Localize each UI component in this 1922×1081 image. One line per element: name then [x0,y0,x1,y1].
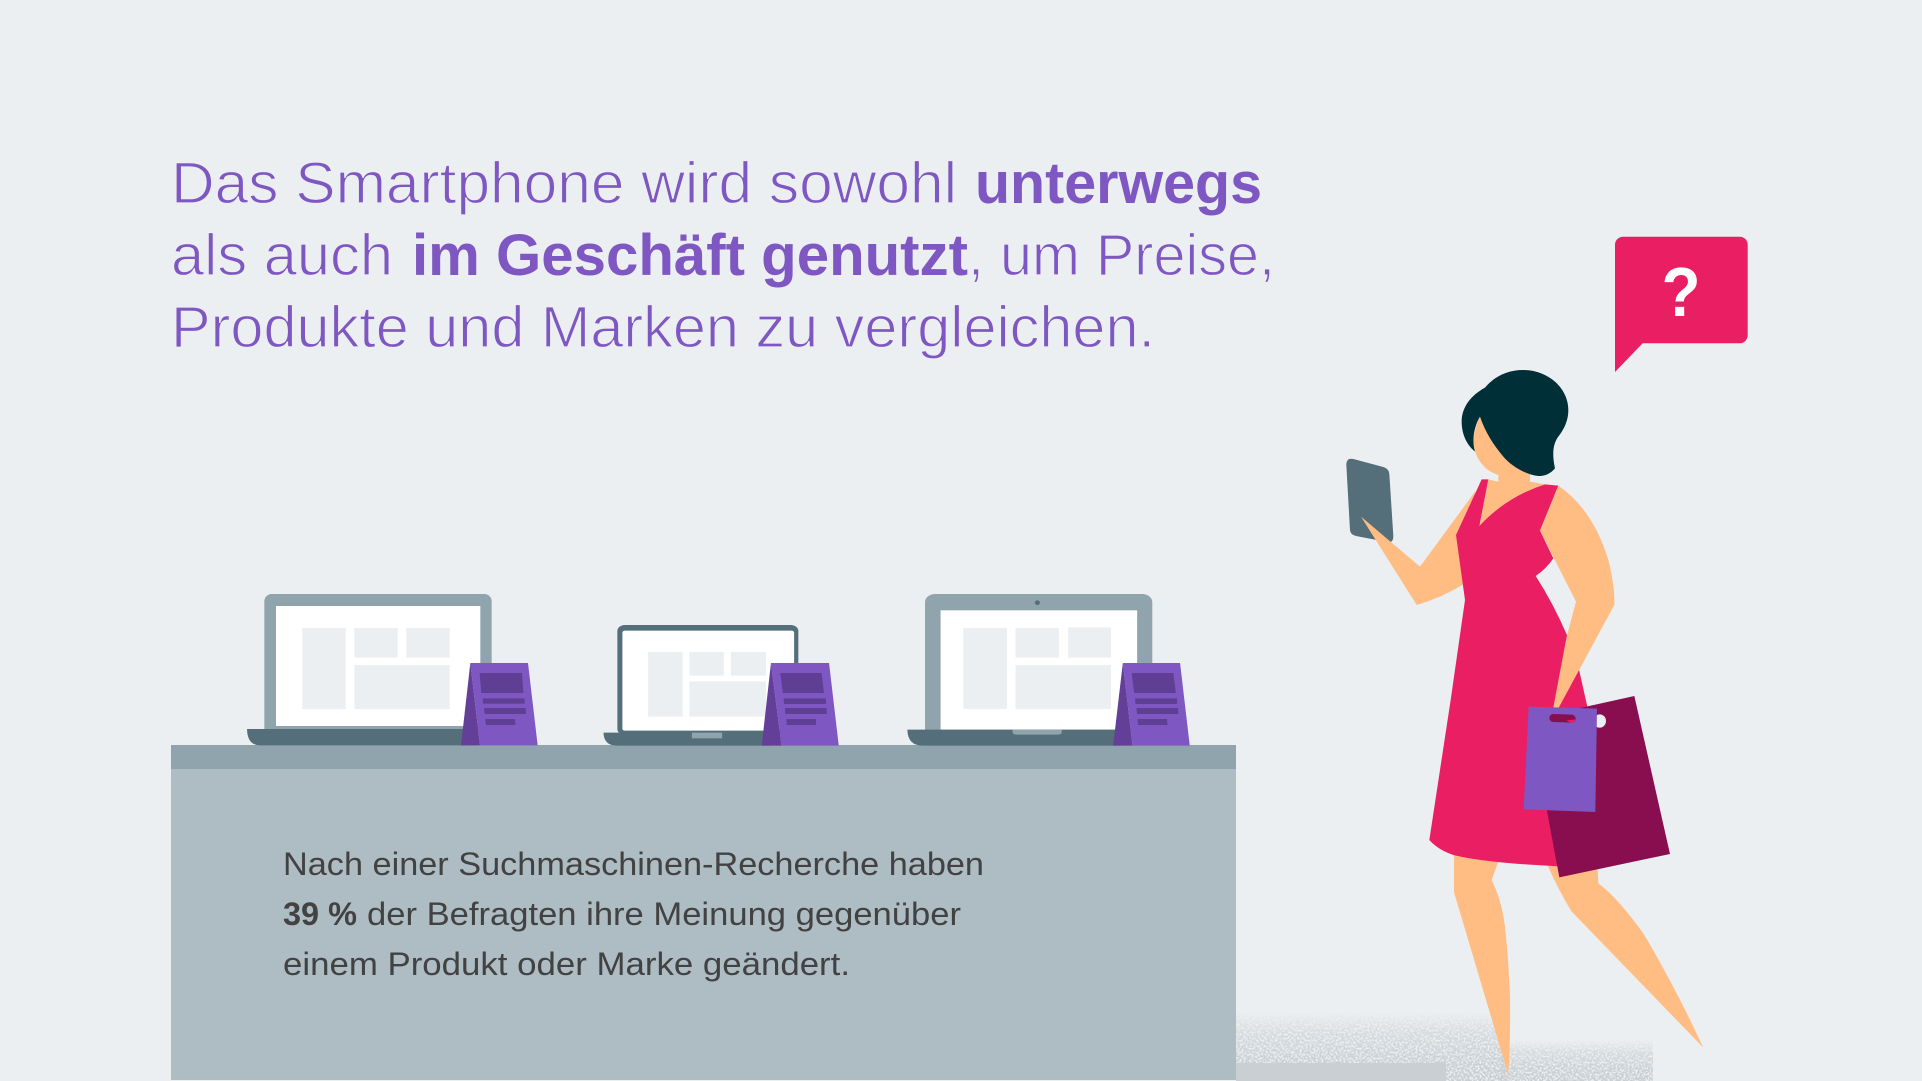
table top [171,745,1236,769]
webcam [1035,600,1040,605]
right leg [1547,863,1703,1048]
front arm and hand [1361,492,1487,605]
panel: table [171,745,1236,1080]
laptop 2 with price sign [603,625,839,746]
laptop base [603,733,771,746]
woman with phone and shopping bags [1346,370,1703,1075]
laptop 3 with price sign [907,594,1190,746]
dress [1429,479,1593,867]
laptop 1 with price sign [247,594,538,745]
laptop lid [264,594,492,730]
question mark: ? [1662,253,1700,331]
hair [1462,370,1568,476]
screen [622,631,794,731]
body text: einem Produkt oder Marke geändert. [283,946,850,982]
price sign [461,663,538,745]
price sign [762,663,839,746]
screen [276,606,480,726]
body text: der Befragten ihre Meinung gegenüber [367,896,961,932]
phone [1346,459,1393,542]
title: unterwegs [975,151,1262,216]
price sign [1113,663,1190,746]
body text [283,846,984,982]
trackpad [692,733,722,738]
title: Das Smartphone wird sowohl [171,151,957,216]
screen panels [302,628,450,709]
laptop base [907,730,1120,746]
speech bubble with question mark [1615,237,1748,372]
title [171,151,1275,360]
notch [1013,730,1062,735]
ground texture [1236,1012,1653,1081]
title: als auch [171,223,393,288]
screen [941,610,1137,730]
body text: 39 % [283,896,357,932]
title: , um Preise, [968,223,1275,288]
body text: Nach einer Suchmaschinen-Recherche haben [283,846,984,882]
title: im Geschäft genutzt [412,223,968,288]
dark shopping bag [1533,696,1670,877]
back arm and hand [1540,486,1614,708]
table body [171,769,1236,1080]
laptop lid [617,625,798,735]
laptop lid [925,594,1152,731]
screen panels [648,652,766,717]
purple shopping bag [1524,707,1597,812]
left leg [1454,853,1510,1075]
screen panels [963,627,1111,709]
face and neck [1474,417,1545,527]
laptop base [247,729,470,745]
title: Produkte und Marken zu vergleichen. [171,295,1155,360]
